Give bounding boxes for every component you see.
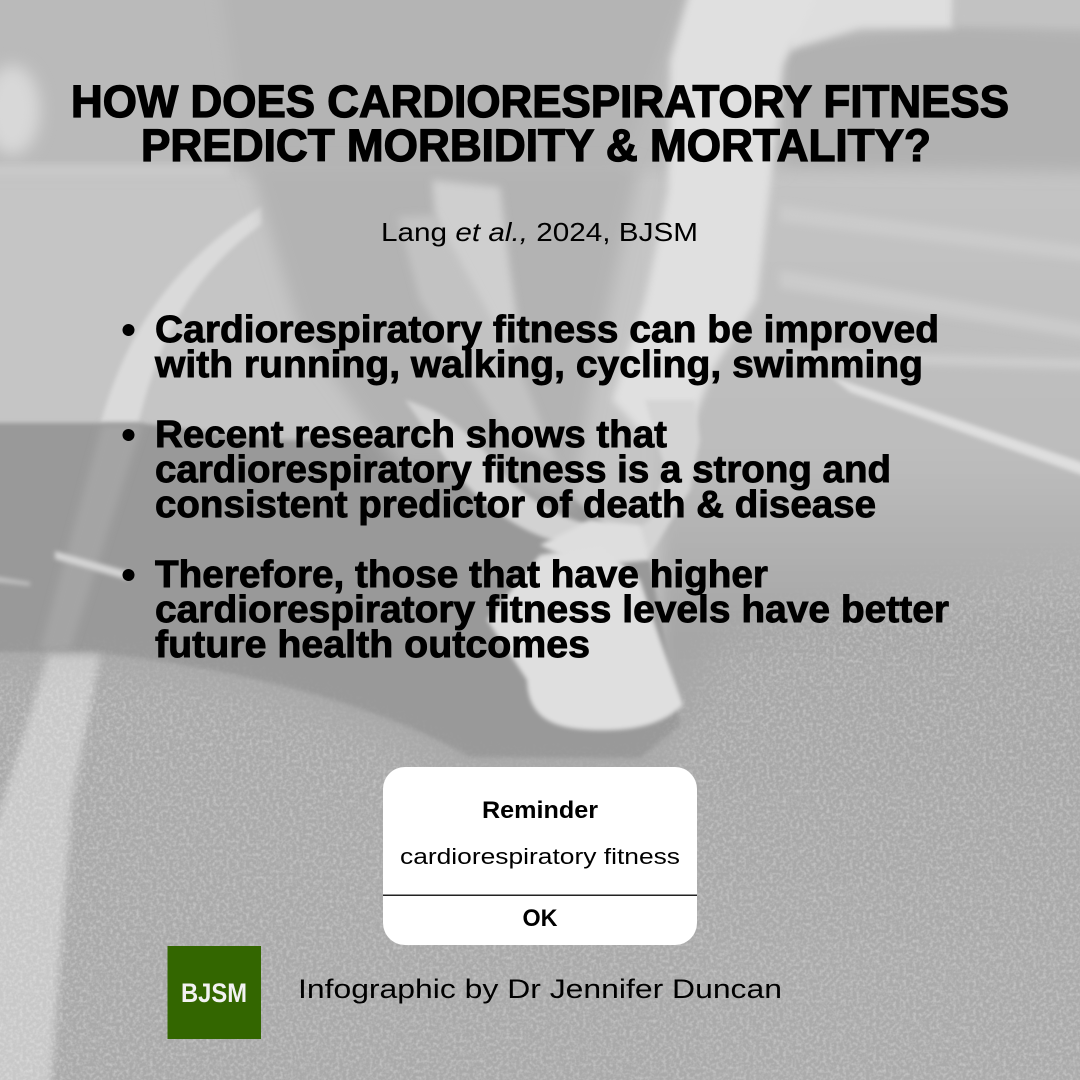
dialog button: OK bbox=[522, 905, 558, 932]
BJSM logo: BJSM bbox=[181, 978, 247, 1008]
lane curve left bbox=[100, 206, 262, 425]
laces bbox=[540, 520, 650, 565]
lane line bbox=[0, 655, 100, 1080]
bullet 3 bbox=[122, 554, 949, 666]
dialog message: cardiorespiratory fitness bbox=[400, 844, 680, 869]
bullet list bbox=[122, 309, 949, 666]
reminder dialog bbox=[383, 767, 697, 945]
shadow on track bbox=[0, 423, 680, 758]
far background band bbox=[0, 0, 780, 170]
bullet 3: cardiorespiratory fitness levels have better bbox=[155, 589, 949, 631]
credit: Infographic by Dr Jennifer Duncan bbox=[298, 974, 782, 1004]
bullet 3: future health outcomes bbox=[155, 624, 590, 666]
bright leg bbox=[612, 0, 820, 430]
shoe bbox=[487, 545, 683, 730]
bullet 1: with running, walking, cycling, swimming bbox=[154, 344, 923, 386]
trees at top right bbox=[780, 22, 1080, 172]
bullet 3: Therefore, those that have higher bbox=[155, 554, 768, 596]
title: HOW DOES CARDIORESPIRATORY FITNESS bbox=[71, 76, 1009, 127]
bullet 1 bbox=[122, 309, 939, 386]
BJSM logo bbox=[168, 946, 261, 1039]
track right side bbox=[660, 150, 1080, 1080]
bullet 2: cardiorespiratory fitness is a strong and bbox=[155, 449, 891, 491]
citation: Lang et al., 2024, BJSM bbox=[381, 217, 698, 247]
dark leg / shorts bbox=[220, 0, 690, 170]
title bbox=[71, 76, 1009, 171]
bullet 2 bbox=[122, 414, 891, 526]
bullet 2: consistent predictor of death & disease bbox=[155, 484, 876, 526]
title: PREDICT MORBIDITY & MORTALITY? bbox=[141, 120, 931, 171]
hands and arms bbox=[405, 400, 590, 545]
bullet 2: Recent research shows that bbox=[155, 414, 667, 456]
lower track bbox=[0, 640, 700, 1080]
bullet 1: Cardiorespiratory fitness can be improved bbox=[155, 309, 939, 351]
dialog heading: Reminder bbox=[482, 797, 598, 824]
second leg band bbox=[432, 180, 520, 345]
faint lane in shadow bbox=[40, 425, 142, 650]
noise texture bbox=[0, 566, 1080, 1080]
